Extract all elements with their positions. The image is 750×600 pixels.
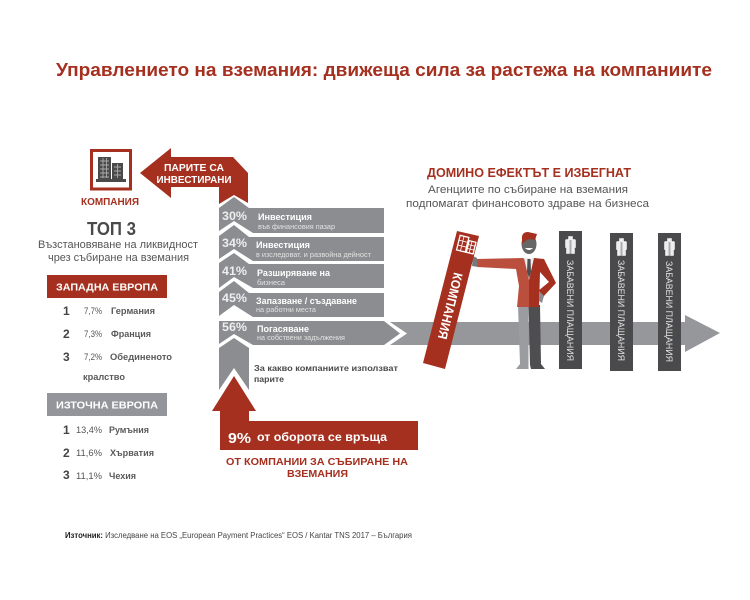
list: Western Europe ranking: 1 bbox=[63, 304, 70, 318]
bar: 56% paying own debts: на собствени задължения bbox=[257, 334, 345, 342]
list: Western Europe ranking: Обединеното bbox=[110, 352, 173, 362]
icon: company building bbox=[92, 150, 130, 189]
list: Western Europe ranking: 3 bbox=[63, 350, 70, 364]
bar: 34% investment in research bbox=[219, 225, 384, 261]
arrow: red turnover arrow: 9% bbox=[228, 430, 251, 447]
arrow: money is invested bbox=[140, 148, 248, 204]
bar: 45% keeping or creating jobs: 45% bbox=[222, 291, 247, 305]
arrow: horizontal gray arrow bbox=[390, 315, 720, 352]
icon: people bbox=[616, 238, 627, 256]
title: Управлението на вземания: движеща сила за растежа на компаниите bbox=[56, 60, 712, 80]
source: Източник: Изследване на EOS „European Payment Practices“ EOS / Kantar TNS 2017 – България bbox=[65, 531, 412, 540]
list: Western Europe ranking: Франция bbox=[111, 329, 151, 339]
arrow: money is invested: ИНВЕСТИРАНИ bbox=[156, 174, 232, 186]
list: Eastern Europe ranking: Хърватия bbox=[110, 448, 154, 458]
panel: Western Europe bbox=[47, 275, 173, 382]
text: what companies use the money for: парите bbox=[254, 374, 284, 384]
list: Western Europe ranking: 7,2% bbox=[84, 352, 102, 362]
list: Eastern Europe ranking bbox=[63, 423, 154, 482]
heading: domino effect avoided: ДОМИНО ЕФЕКТЪТ Е ИЗБЕГНАТ bbox=[427, 166, 631, 180]
list: Eastern Europe ranking: Чехия bbox=[109, 471, 136, 481]
text: from collection companies: ОТ КОМПАНИИ ЗА СЪБИРАНЕ НА bbox=[226, 456, 408, 468]
list: Western Europe ranking: 2 bbox=[63, 327, 70, 341]
list: Eastern Europe ranking: 3 bbox=[63, 468, 70, 482]
domino: delayed payments 1: ЗАБАВЕНИ ПЛАЩАНИЯ bbox=[565, 260, 575, 361]
bar: 45% keeping or creating jobs: на работни места bbox=[256, 306, 316, 314]
icon: people bbox=[565, 236, 576, 254]
text: agencies support bbox=[406, 184, 650, 210]
bar: 34% investment in research: в изследоват. и развойна дейност bbox=[256, 251, 372, 259]
bar: 30% investment in financial market: 30% bbox=[222, 209, 247, 223]
text: from collection companies bbox=[226, 456, 408, 480]
bar: 56% paying own debts: Погасяване bbox=[257, 324, 309, 335]
domino: delayed payments 3: ЗАБАВЕНИ ПЛАЩАНИЯ bbox=[664, 261, 674, 362]
list: Western Europe ranking: 7,3% bbox=[84, 329, 102, 339]
text: agencies support: Агенциите по събиране на вземания bbox=[428, 184, 628, 196]
list: Eastern Europe ranking: 13,4% bbox=[76, 425, 102, 435]
list: Eastern Europe ranking: 11,6% bbox=[76, 448, 102, 458]
bar: 34% investment in research: Инвестиция bbox=[256, 240, 310, 251]
domino: company: КОМПАНИЯ bbox=[435, 271, 466, 341]
company label: КОМПАНИЯ bbox=[81, 197, 139, 208]
text: from collection companies: ВЗЕМАНИЯ bbox=[287, 468, 348, 480]
icon: small building bbox=[457, 235, 477, 254]
heading: Eastern Europe: ИЗТОЧНА ЕВРОПА bbox=[56, 400, 158, 412]
heading: top 3: ТОП 3 bbox=[87, 219, 136, 239]
domino: delayed payments 1 bbox=[559, 231, 582, 369]
bar: 30% investment in financial market: във финансовия пазар bbox=[258, 224, 335, 231]
bar: stem segment bbox=[219, 338, 249, 390]
panel: Eastern Europe bbox=[47, 393, 167, 482]
text: agencies support: подпомагат финансовото здраве на бизнеса bbox=[406, 198, 650, 210]
arrow: red turnover arrow bbox=[212, 376, 418, 450]
domino: delayed payments 2: ЗАБАВЕНИ ПЛАЩАНИЯ bbox=[616, 260, 626, 361]
chart: use of money bars bbox=[219, 197, 400, 390]
arrow: money is invested: ПАРИТЕ СА bbox=[164, 162, 224, 174]
domino: delayed payments 2 bbox=[610, 233, 633, 371]
list: Western Europe ranking: кралство bbox=[83, 372, 126, 382]
domino: delayed payments 3 bbox=[658, 233, 681, 371]
arrow: red turnover arrow: от оборота се връща bbox=[257, 432, 388, 444]
bar: 41% business expansion: Разширяване на bbox=[257, 268, 331, 279]
icon: people bbox=[664, 238, 675, 256]
list: Western Europe ranking: Германия bbox=[111, 306, 155, 316]
bar: 30% investment in financial market bbox=[219, 197, 384, 233]
bar: 41% business expansion bbox=[219, 253, 384, 288]
text: liquidity recovery: Възстановяване на ликвидност bbox=[38, 239, 198, 251]
list: Western Europe ranking: 7,7% bbox=[84, 306, 102, 316]
bar: 30% investment in financial market: Инвестиция bbox=[258, 212, 312, 223]
heading: Western Europe: ЗАПАДНА ЕВРОПА bbox=[56, 282, 158, 294]
list: Western Europe ranking bbox=[63, 304, 173, 382]
bar: 41% business expansion: 41% bbox=[222, 264, 247, 278]
bar: 45% keeping or creating jobs: Запазване / създаване bbox=[256, 296, 357, 307]
bar: 34% investment in research: 34% bbox=[222, 236, 247, 250]
domino: company bbox=[423, 231, 479, 369]
text: what companies use the money for bbox=[254, 363, 398, 384]
bar: 41% business expansion: бизнеса bbox=[257, 279, 285, 287]
text: what companies use the money for: За какво компаниите използват bbox=[254, 363, 398, 373]
bar: 56% paying own debts: 56% bbox=[222, 320, 247, 334]
illustration: man holding domino bbox=[472, 232, 556, 369]
text: liquidity recovery: чрез събиране на вземания bbox=[48, 252, 189, 264]
list: Eastern Europe ranking: 11,1% bbox=[76, 471, 102, 481]
list: Eastern Europe ranking: 1 bbox=[63, 423, 70, 437]
list: Eastern Europe ranking: 2 bbox=[63, 446, 70, 460]
bar: 56% paying own debts bbox=[219, 320, 400, 345]
bar: 45% keeping or creating jobs bbox=[219, 281, 384, 317]
list: Eastern Europe ranking: Румъния bbox=[109, 425, 149, 435]
text: liquidity recovery bbox=[38, 239, 198, 264]
